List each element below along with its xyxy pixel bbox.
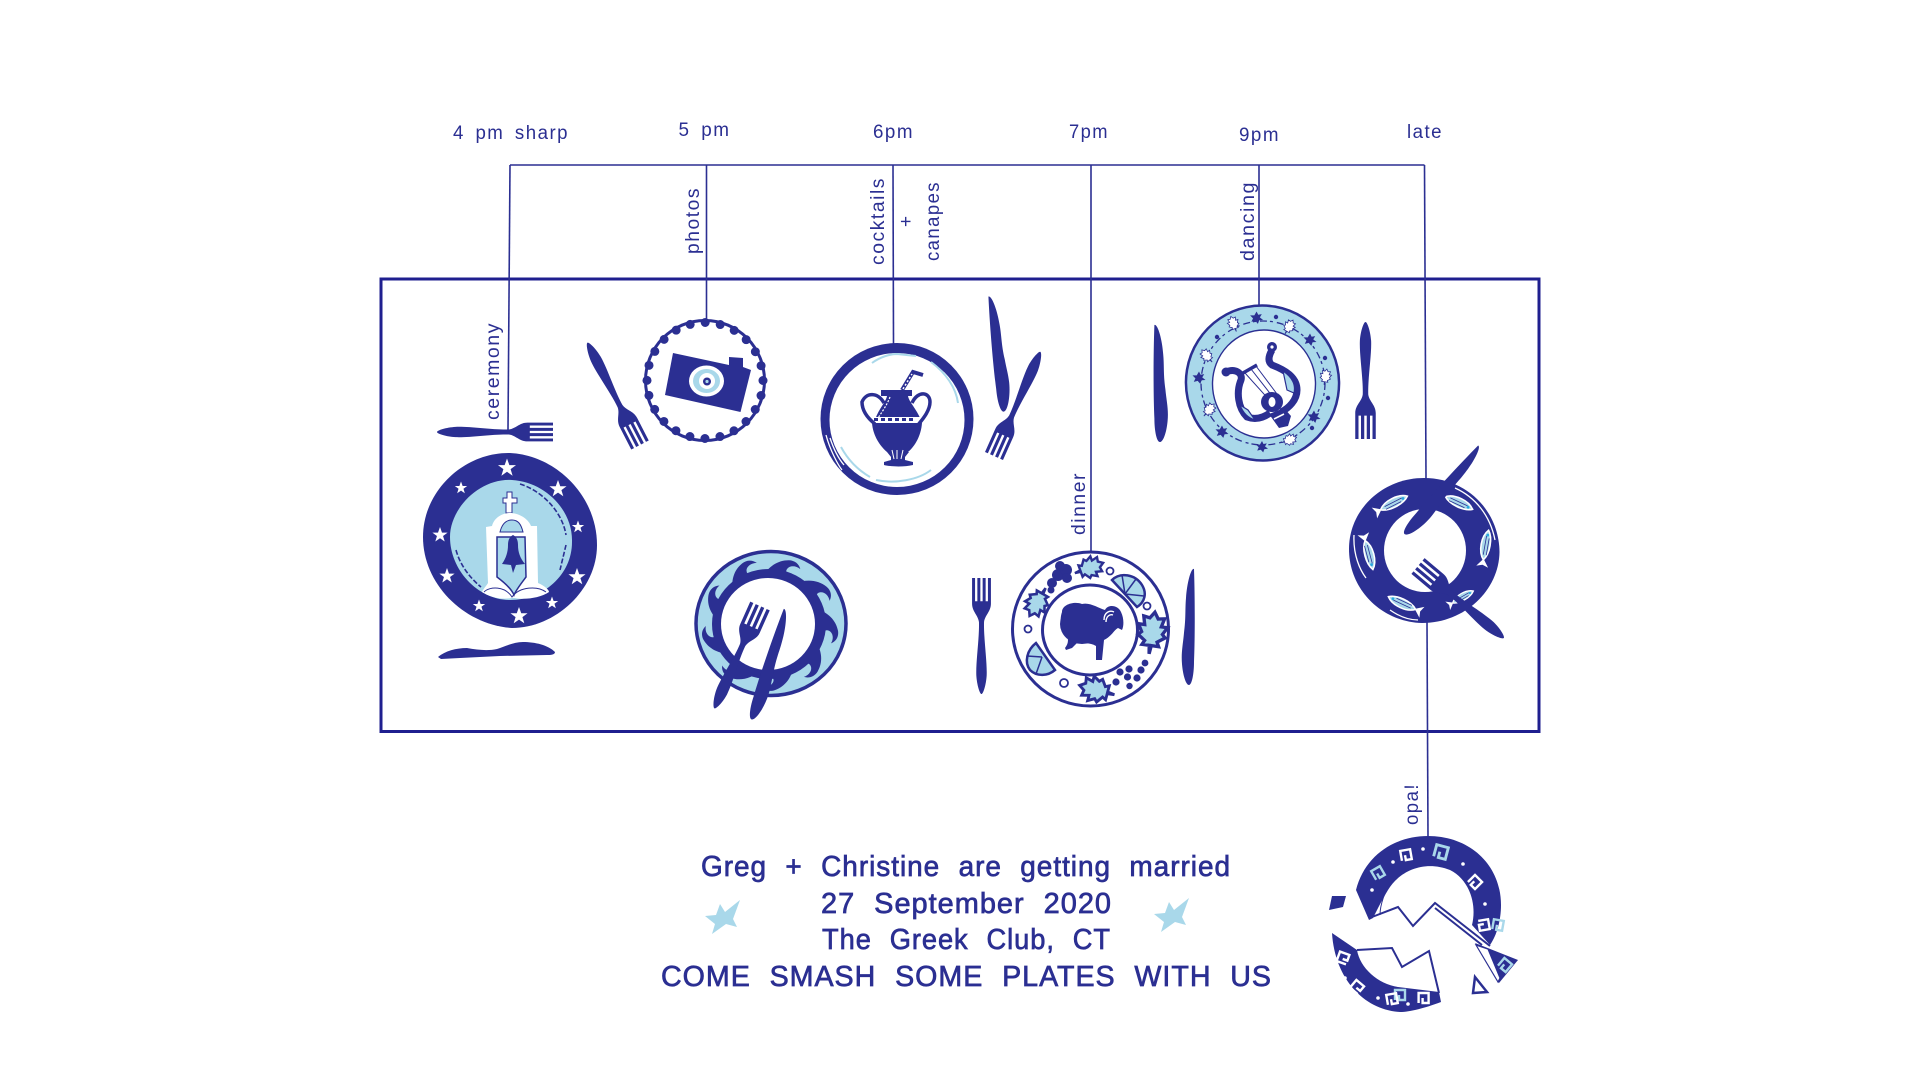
wave ring — [699, 556, 838, 693]
plate rim with stars — [423, 453, 597, 628]
dancing knife — [1154, 325, 1168, 442]
broken plate — [1329, 836, 1518, 1012]
dancing fork — [1355, 322, 1376, 439]
plate rim — [696, 552, 846, 696]
scalloped plate — [644, 319, 766, 442]
ceremony fork — [437, 423, 553, 441]
late knife — [1400, 445, 1488, 539]
jagged break line — [1372, 903, 1490, 946]
icon: left light blue star — [705, 900, 740, 934]
event label: cocktails: cocktails — [868, 177, 889, 265]
dashes on plate centre — [456, 484, 566, 587]
wave plate fork — [705, 602, 770, 713]
white rim strokes — [1354, 488, 1495, 620]
place setting: dinner sheep plate — [972, 552, 1195, 707]
event label: dancing: dancing — [1238, 181, 1259, 261]
dinner knife — [1182, 569, 1195, 685]
ceremony knife — [438, 642, 555, 659]
lower break line — [1357, 948, 1439, 993]
time label: late: late — [1407, 122, 1443, 143]
lyre icon — [1222, 342, 1297, 428]
event label: opa!: opa! — [1402, 783, 1423, 825]
light blue highlights — [841, 354, 958, 482]
cocktails fork — [985, 348, 1049, 460]
event label: plus sign: + — [896, 214, 917, 227]
crack detail — [1380, 880, 1392, 915]
white marks on rim — [826, 435, 844, 470]
place setting: wave pattern plate — [696, 552, 846, 722]
event label: canapes: canapes — [923, 181, 944, 261]
right shard — [1475, 943, 1518, 983]
key pattern — [1337, 845, 1512, 1006]
time label: 4 pm sharp: 4 pm sharp — [453, 123, 569, 144]
late fork — [1411, 558, 1510, 646]
right shard white strip — [1476, 945, 1500, 982]
camera icon — [665, 353, 751, 412]
plate rim — [1012, 552, 1168, 706]
icon: right light blue star — [1154, 898, 1189, 932]
amphora icon — [862, 372, 930, 466]
wave plate knife — [746, 609, 797, 722]
leaves, citrus and grapes — [1020, 553, 1169, 707]
vine decoration — [1192, 312, 1332, 452]
invitation text — [661, 851, 1272, 993]
dinner fork — [972, 578, 991, 694]
time label: 5 pm: 5 pm — [678, 120, 730, 141]
event label: dinner: dinner — [1069, 472, 1090, 535]
place setting: photos camera plate — [579, 319, 766, 449]
plate rim — [820, 343, 974, 495]
plate centre — [830, 353, 964, 487]
photos fork — [579, 338, 649, 449]
inner ring — [1042, 585, 1138, 675]
event label: photos: photos — [683, 187, 704, 254]
time label: 9pm: 9pm — [1239, 125, 1280, 146]
fish decoration — [1358, 488, 1495, 618]
time label: 7pm: 7pm — [1069, 122, 1109, 143]
plate centre — [1384, 509, 1466, 592]
cocktails knife — [988, 295, 1012, 412]
bell tower — [482, 492, 549, 599]
plate centre — [450, 480, 572, 600]
sheep icon — [1060, 603, 1123, 660]
table outline — [381, 279, 1539, 732]
place setting: cocktails vase plate — [820, 295, 1049, 495]
plate centre — [1212, 330, 1316, 438]
timeline connector lines — [508, 165, 1428, 837]
line: call to action: COME SMASH SOME PLATES WITH US — [661, 961, 1272, 993]
event label: ceremony: ceremony — [483, 322, 504, 420]
lower fragment — [1332, 933, 1441, 1012]
white stars — [432, 458, 586, 623]
place setting: ceremony bell plate — [423, 423, 597, 659]
bottom shard — [1473, 977, 1487, 993]
place setting: dancing lyre plate — [1154, 291, 1376, 475]
place setting: late fish plate — [1349, 445, 1510, 646]
line: venue: The Greek Club, CT — [822, 924, 1111, 956]
line: names: Greg + Christine are getting married — [701, 851, 1231, 883]
left shard — [1329, 896, 1346, 910]
plate rim — [1172, 291, 1353, 475]
top fragment — [1356, 836, 1501, 945]
plate rim — [1349, 478, 1500, 623]
line: date: 27 September 2020 — [821, 888, 1112, 920]
time label: 6pm: 6pm — [873, 122, 914, 143]
